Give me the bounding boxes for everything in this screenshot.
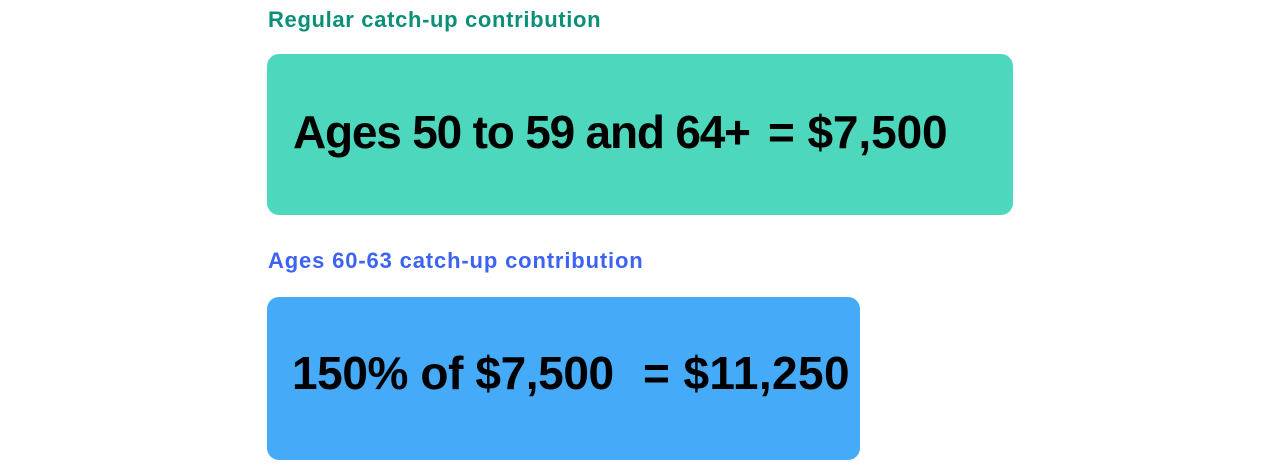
heading: ages 60-63 catch-up: Ages 60-63 catch-up contribution bbox=[268, 248, 644, 273]
heading: regular catch-up: Regular catch-up contribution bbox=[268, 7, 601, 32]
text: equals 7,500: = $7,500 bbox=[768, 106, 948, 158]
panel: regular catch-up amount bbox=[267, 54, 1013, 215]
text: equals 11,250: = $11,250 bbox=[643, 347, 850, 399]
text: ages 50 to 59 and 64+: Ages 50 to 59 and 64+ bbox=[293, 106, 750, 158]
text: 150% of 7,500: 150% of $7,500 bbox=[292, 347, 614, 399]
panel: ages 60-63 amount bbox=[267, 297, 860, 460]
